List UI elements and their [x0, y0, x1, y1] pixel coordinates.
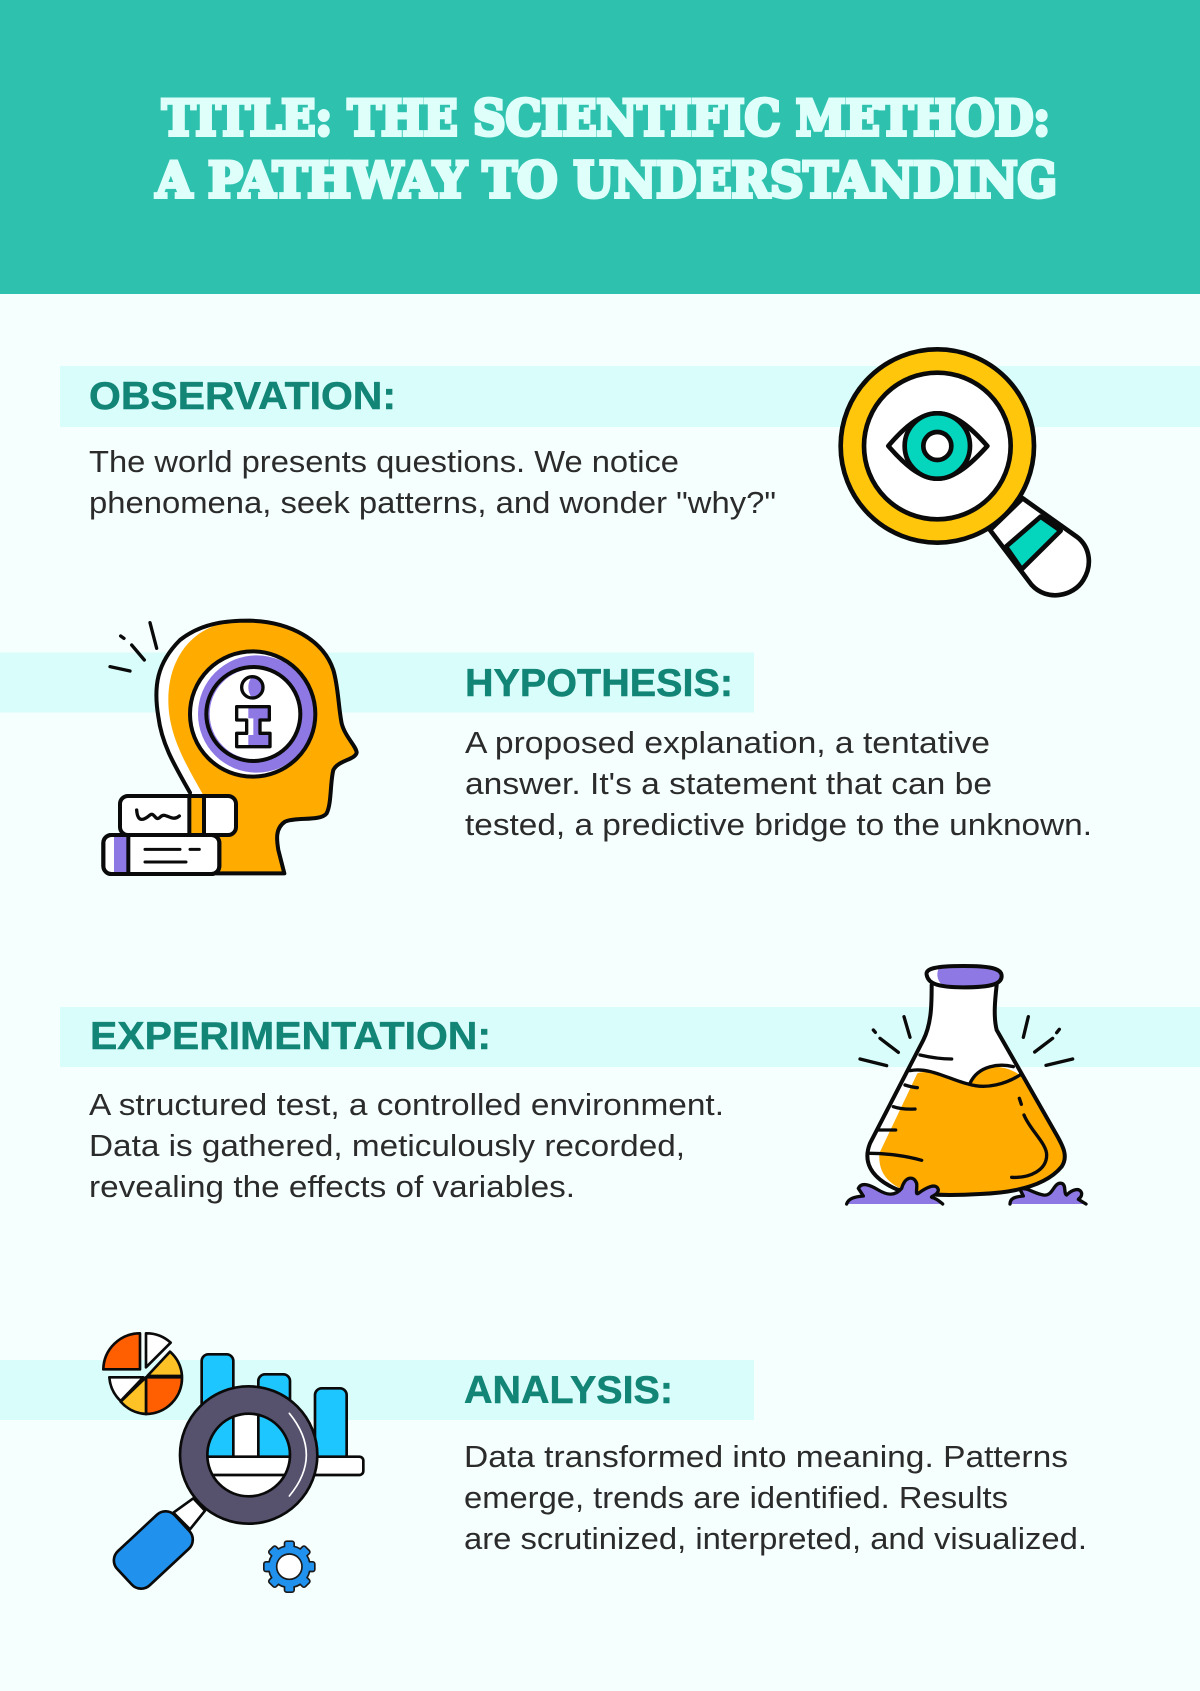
header banner: [0, 0, 1200, 294]
heading: observation: OBSERVATION:: [89, 375, 396, 418]
heading: analysis: ANALYSIS:: [464, 1369, 673, 1412]
panel: observation: [60, 349, 1200, 595]
text: hypothesis body: tested, a predictive bridge to the unknown.: [465, 807, 1092, 842]
text: hypothesis body: answer. It's a statement that can be: [465, 766, 992, 801]
text: observation body: [89, 444, 776, 520]
text: analysis body: Data transformed into meaning. Patterns: [464, 1439, 1068, 1474]
panel: hypothesis: [0, 621, 1092, 874]
text: hypothesis body: [465, 725, 1092, 842]
text: experimentation body: [89, 1087, 724, 1204]
icon: magnifying glass with eye: [841, 349, 1089, 595]
text: experimentation body: Data is gathered, meticulously recorded,: [89, 1128, 685, 1163]
icon: head with info sign and books: [103, 621, 357, 874]
text: experimentation body: A structured test, a controlled environment.: [89, 1087, 724, 1122]
text: analysis body: are scrutinized, interpreted, and visualized.: [464, 1521, 1087, 1556]
panel: analysis: [0, 1333, 1087, 1594]
title: [155, 90, 1057, 209]
text: hypothesis body: A proposed explanation, a tentative: [465, 725, 990, 760]
heading: hypothesis: HYPOTHESIS:: [465, 662, 733, 705]
text: observation body: phenomena, seek patterns, and wonder "why?": [89, 485, 776, 520]
panel: experimentation: [60, 966, 1200, 1204]
title: A PATHWAY TO UNDERSTANDING: [155, 152, 1057, 209]
icon: erlenmeyer flask: [847, 966, 1086, 1204]
text: observation body: The world presents questions. We notice: [89, 444, 679, 479]
text: analysis body: emerge, trends are identified. Results: [464, 1480, 1008, 1515]
icon: data analysis magnifier with charts and gear: [103, 1333, 363, 1594]
text: analysis body: [464, 1439, 1087, 1556]
heading: experimentation: EXPERIMENTATION:: [90, 1015, 491, 1058]
text: experimentation body: revealing the effects of variables.: [89, 1169, 575, 1204]
title: TITLE: THE SCIENTIFIC METHOD:: [162, 90, 1050, 147]
